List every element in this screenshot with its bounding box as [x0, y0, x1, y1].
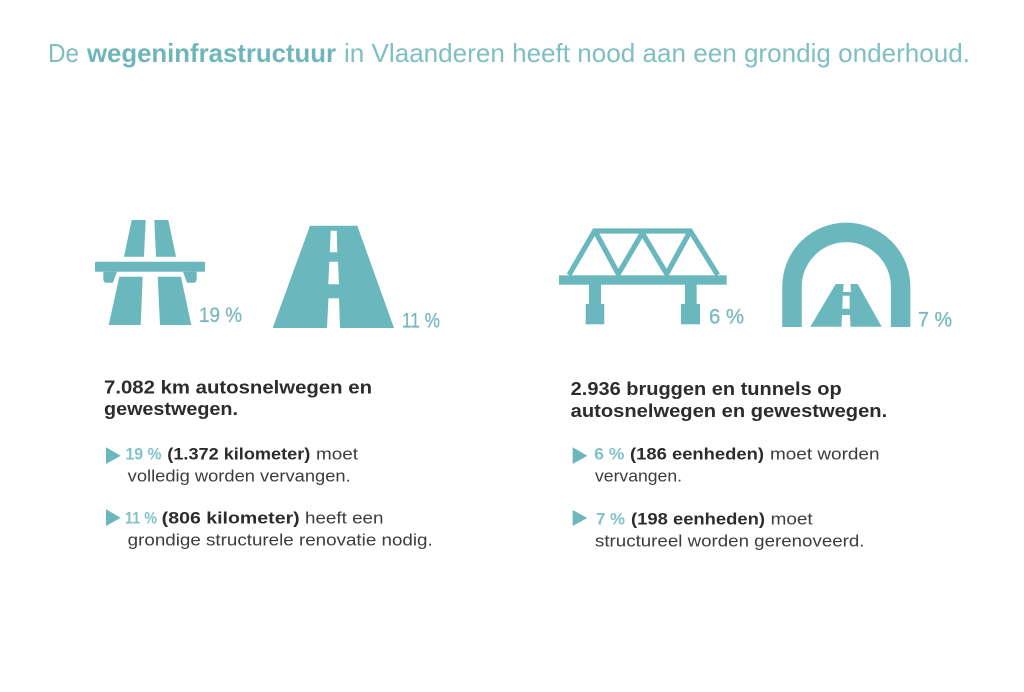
heading: bridges and tunnels [571, 378, 887, 421]
title: in Vlaanderen heeft nood aan een grondig onderhoud. [344, 38, 970, 68]
bullet: 6 % replace: vervangen. [595, 467, 682, 486]
bullet: 11 % renovate: (806 kilometer) [162, 508, 300, 528]
bullet: 6 % replace: moet worden [770, 444, 880, 464]
icon: tunnel [792, 232, 901, 327]
bullet: 7 % renovate [573, 510, 864, 551]
label: 11 %: 11 % [402, 310, 440, 332]
bullet: 19 % replace: 19 % [126, 444, 162, 464]
bullet: 19 % replace: volledig worden vervangen. [128, 467, 351, 486]
icon: truss bridge [559, 231, 727, 324]
label: 7 %: 7 % [918, 308, 952, 332]
bullet: 11 % renovate: grondige structurele renovatie nodig. [128, 531, 433, 550]
heading: roads [104, 376, 372, 419]
icon: road [273, 226, 394, 328]
bullet: 19 % replace: moet [316, 444, 358, 464]
heading: bridges and tunnels: autosnelwegen en gewestwegen. [571, 400, 887, 421]
icon: highway overpass [95, 220, 205, 325]
heading: bridges and tunnels: 2.936 bruggen en tunnels op [571, 378, 842, 399]
title [48, 38, 970, 68]
bullet: 6 % replace [573, 444, 880, 486]
bullet: 19 % replace: (1.372 kilometer) [167, 444, 310, 464]
title: De [48, 38, 79, 68]
bullet: 11 % renovate [106, 508, 433, 550]
bullet: 7 % renovate: 7 % [596, 510, 625, 528]
bullet: 7 % renovate: moet [771, 510, 813, 528]
title: wegeninfrastructuur [86, 38, 336, 68]
label: 6 %: 6 % [709, 306, 744, 328]
bullet: 7 % renovate: structureel worden gerenoveerd. [595, 532, 864, 551]
panel: bridges and tunnels text [571, 378, 887, 551]
bullet: 6 % replace: 6 % [594, 444, 624, 464]
heading: roads: 7.082 km autosnelwegen en [104, 376, 372, 398]
panel: roads text [104, 376, 433, 550]
bullet: 11 % renovate: heeft een [305, 508, 384, 528]
bullet: 7 % renovate: (198 eenheden) [631, 510, 765, 528]
bullet: 19 % replace [106, 444, 358, 486]
bullet: 11 % renovate: 11 % [125, 508, 157, 528]
heading: roads: gewestwegen. [104, 398, 238, 419]
bullet: 6 % replace: (186 eenheden) [630, 444, 764, 464]
label: 19 %: 19 % [199, 304, 242, 327]
